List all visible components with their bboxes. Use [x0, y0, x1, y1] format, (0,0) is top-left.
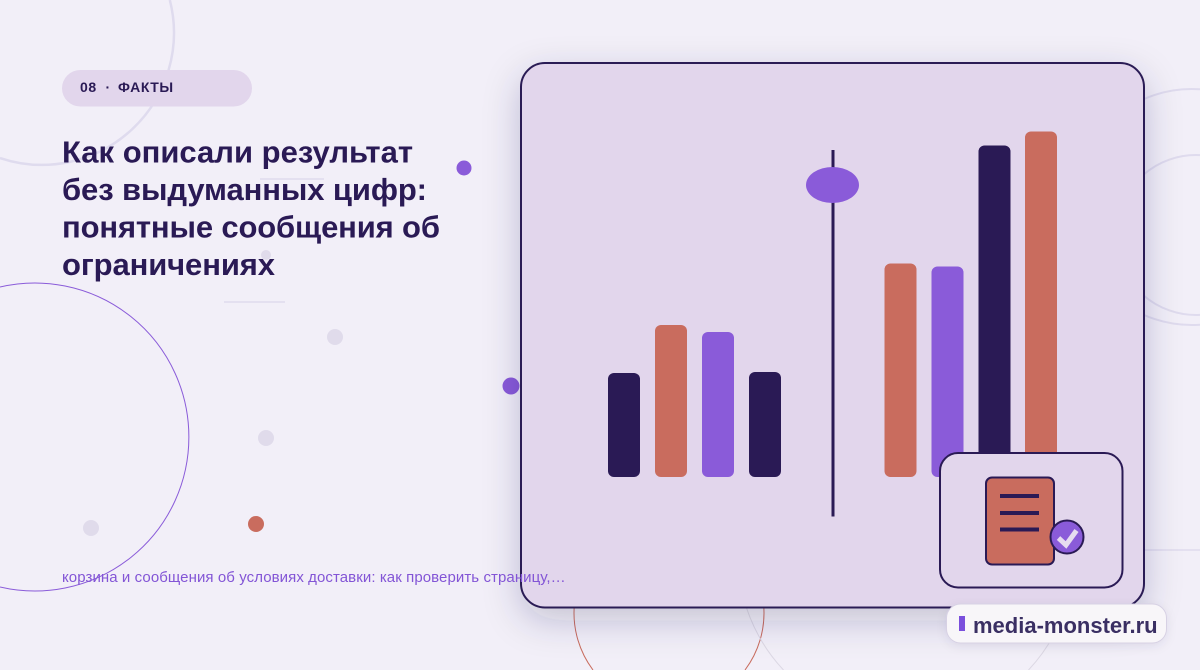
- subtitle: корзина и сообщения об условиях доставки: как проверить страницу,…: [62, 569, 566, 586]
- badge: section label: 08: [80, 79, 97, 95]
- title: понятные сообщения об: [62, 210, 440, 244]
- divider with marker: [806, 150, 859, 516]
- brand label: media-monster.ru: [973, 613, 1158, 638]
- badge: section label: ·: [106, 79, 111, 95]
- bar chart: right group: [884, 132, 1057, 477]
- badge: section label: [62, 70, 252, 106]
- icon: check badge: [1050, 520, 1084, 554]
- title: [62, 134, 440, 282]
- title: ограничениях: [62, 247, 276, 282]
- inset card: checked document: [940, 453, 1122, 588]
- brand label: [946, 604, 1166, 643]
- bar chart: left group: [608, 325, 781, 477]
- title: Как описали результат: [62, 134, 413, 170]
- title: без выдуманных цифр:: [62, 172, 427, 207]
- icon: document: [986, 478, 1054, 564]
- panel: chart card: [521, 63, 1144, 608]
- decorative dots: [83, 160, 520, 536]
- badge: section label: ФАКТЫ: [118, 79, 174, 95]
